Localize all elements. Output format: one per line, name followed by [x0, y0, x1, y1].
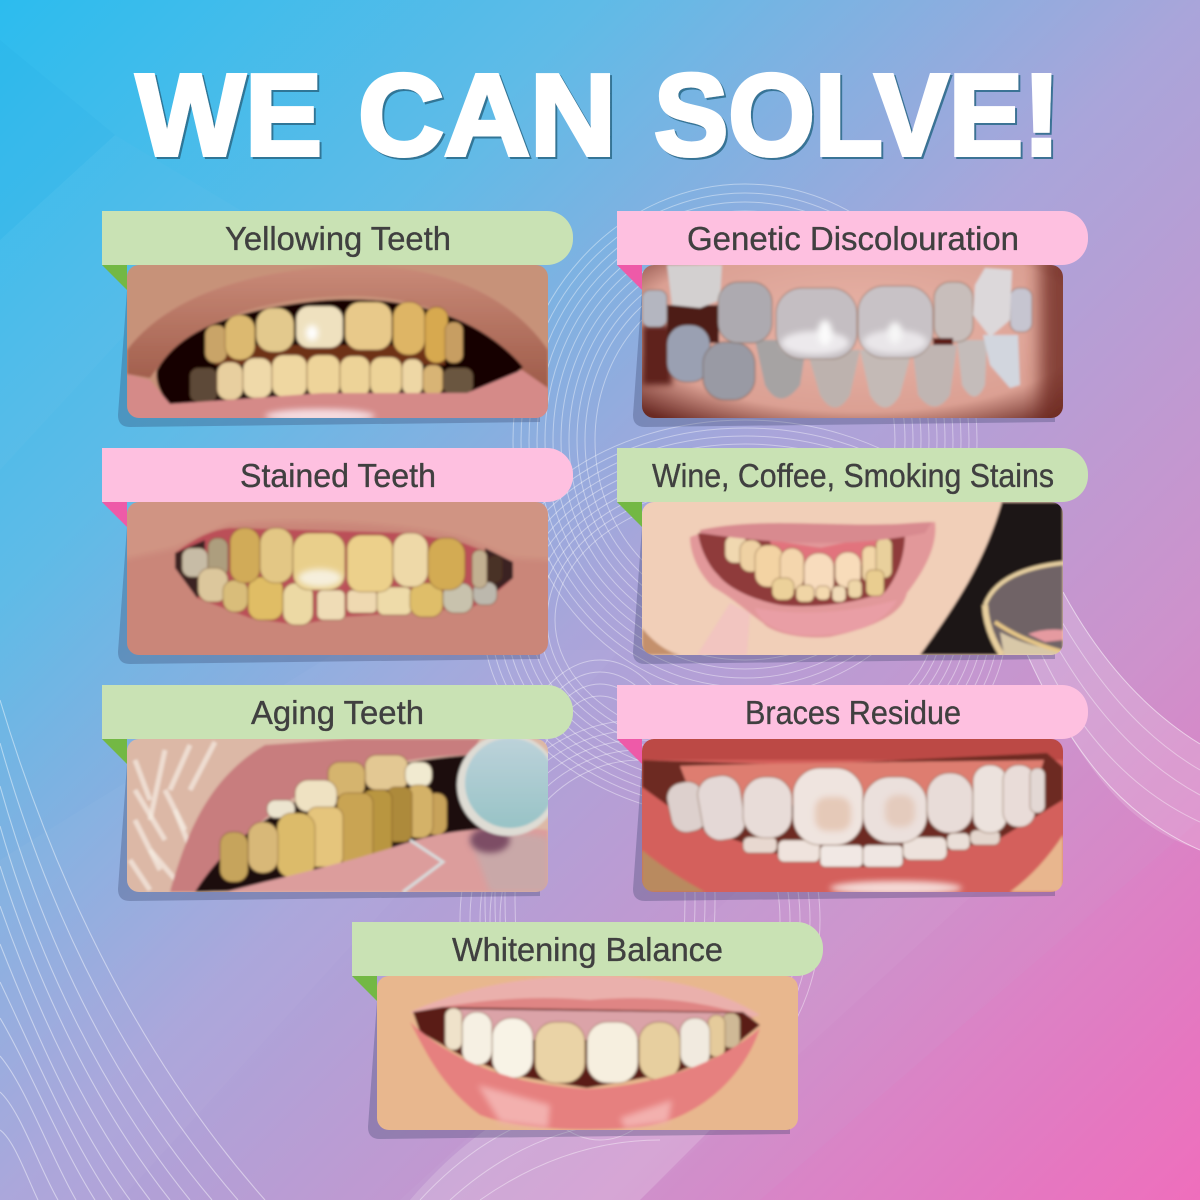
label: [102, 685, 573, 739]
panel: stained teeth: [102, 448, 573, 664]
fold triangle: [617, 265, 642, 290]
label: [617, 685, 1088, 739]
panel: genetic discolouration: [617, 211, 1088, 430]
photo: yellowing teeth: [127, 265, 548, 418]
title: [136, 50, 1060, 180]
panel: yellowing teeth: [102, 211, 573, 427]
label: [617, 211, 1088, 265]
photo: stained teeth: [127, 502, 548, 655]
panel: aging teeth: [102, 685, 573, 901]
card shadow: [633, 764, 1055, 901]
label text: Aging Teeth: [251, 694, 424, 731]
card shadow: [633, 290, 1055, 427]
card shadow: [118, 290, 540, 427]
photo: braces residue: [642, 739, 1063, 892]
photo: genetic discolouration: [642, 265, 1063, 418]
fold triangle: [102, 265, 127, 290]
label: [102, 211, 573, 265]
background line pattern: right ribbon: [1026, 592, 1200, 850]
card shadow: [118, 527, 540, 664]
fold triangle: [102, 739, 127, 764]
label text: Genetic Discolouration: [687, 220, 1019, 257]
label text: Braces Residue: [745, 694, 961, 731]
panel: braces residue: [617, 685, 1088, 901]
fold triangle: [352, 976, 377, 1001]
background line pattern: bottom centre arc: [410, 1080, 720, 1200]
fold triangle: [617, 502, 642, 527]
label: [617, 448, 1088, 502]
card shadow: [633, 527, 1055, 664]
fold triangle: [617, 739, 642, 764]
background line pattern: bottom left fan: [0, 700, 265, 1200]
label text: Wine, Coffee, Smoking Stains: [652, 457, 1054, 494]
title: SOLVE!: [654, 50, 1060, 180]
panel: wine coffee smoking stains: [617, 448, 1088, 664]
photo: wine coffee smoking stains: [642, 502, 1063, 655]
label: [352, 922, 823, 976]
background line pattern: central rings: [460, 184, 1007, 1140]
panel: whitening balance: [352, 922, 823, 1139]
label text: Whitening Balance: [452, 931, 723, 968]
photo: whitening balance: [370, 971, 805, 1136]
card shadow: [368, 1001, 790, 1139]
fold triangle: [102, 502, 127, 527]
photo: aging teeth: [127, 739, 548, 892]
label text: Yellowing Teeth: [225, 220, 451, 257]
label text: Stained Teeth: [240, 457, 436, 494]
title: WE: [136, 50, 322, 180]
title: CAN: [358, 50, 616, 180]
card shadow: [118, 764, 540, 901]
label: [102, 448, 573, 502]
